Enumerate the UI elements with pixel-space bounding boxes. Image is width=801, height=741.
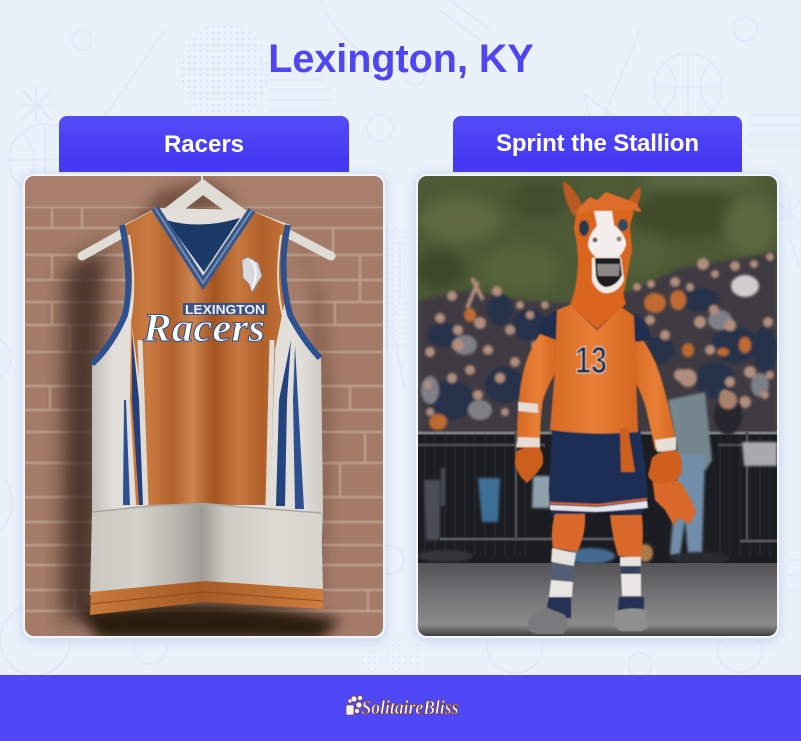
- mascot: [515, 181, 696, 634]
- bottom panel: [91, 503, 323, 594]
- brick wall: [25, 176, 383, 636]
- tab: Sprint the Stallion: Sprint the Stallion: [496, 130, 699, 157]
- fence and legs: [417, 369, 777, 564]
- ground: [418, 563, 777, 636]
- jersey wordmark: LEXINGTON: [185, 303, 265, 317]
- logo card icon: [346, 696, 362, 715]
- tab: Racers: [59, 116, 349, 172]
- right arm: [634, 330, 676, 450]
- neck: [570, 256, 626, 329]
- jersey shadow on wall: [62, 245, 105, 620]
- hanger: [82, 176, 331, 256]
- tab: Sprint the Stallion: [453, 116, 742, 172]
- arm cuffs: [516, 402, 540, 447]
- tail: [652, 478, 696, 526]
- left arm: [517, 332, 558, 448]
- jersey horse badge: [242, 257, 262, 292]
- spectator in grey shirt: [668, 369, 742, 555]
- side stripes: [130, 320, 140, 505]
- title: Lexington, KY: [268, 37, 534, 81]
- socks: [551, 548, 576, 566]
- mouth: [592, 256, 624, 293]
- head: [563, 181, 642, 293]
- jersey body: [90, 208, 323, 615]
- shorts: [549, 428, 648, 518]
- waist tie: [620, 428, 635, 472]
- background dot texture: [181, 22, 420, 674]
- panel: jersey photo: [22, 174, 386, 640]
- jersey wordmark: Racers: [142, 305, 265, 350]
- orange hem: [90, 581, 323, 615]
- shoes: [545, 597, 571, 618]
- trees: [416, 173, 777, 436]
- logo: SolitaireBliss: SolitaireBliss: [362, 697, 459, 719]
- eyes: [579, 220, 589, 236]
- tab: Racers: Racers: [164, 131, 244, 158]
- jersey number: 13: [575, 340, 607, 382]
- panel: mascot photo: [416, 173, 780, 638]
- collar trim: [155, 208, 252, 283]
- shoulder patches: [537, 310, 557, 340]
- jersey: [550, 304, 638, 434]
- armhole trim: [92, 225, 128, 364]
- face blaze: [588, 211, 626, 258]
- gloves: [515, 448, 543, 483]
- legs: [552, 514, 585, 552]
- navy collar inner: [166, 218, 240, 272]
- crowd: [418, 252, 777, 436]
- footer bar: [0, 675, 801, 741]
